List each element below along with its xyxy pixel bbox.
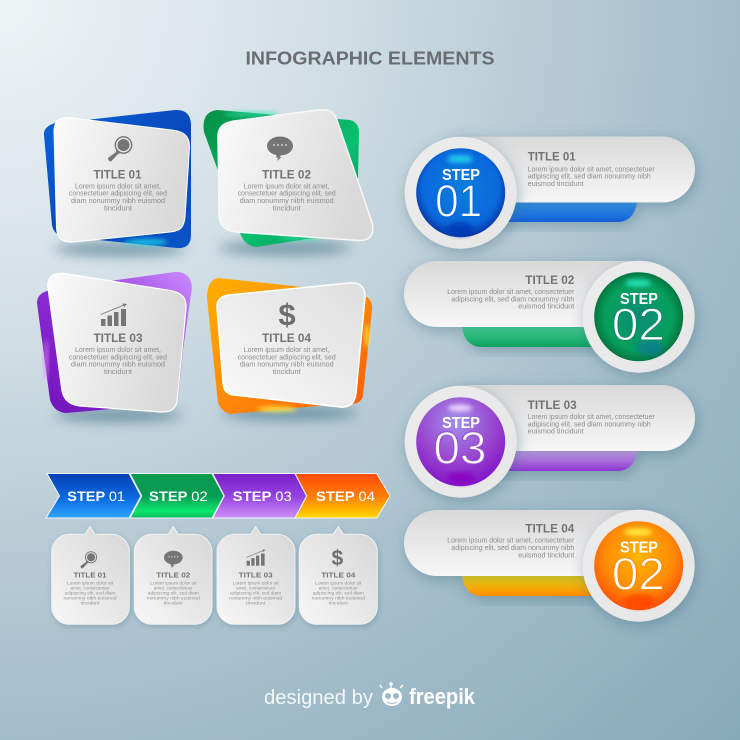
text: body 04: diam nonummy nibh euismod	[240, 360, 334, 369]
text: small body 02: nonummy nibh euismod	[147, 595, 200, 600]
step arrow 3	[213, 474, 307, 518]
icon: small speech bubble	[164, 551, 183, 568]
text: title 04: TITLE 04	[262, 333, 312, 345]
footer credit: freepik	[409, 684, 476, 709]
text: small body 03: adipiscing elit, sed diam	[230, 590, 282, 595]
text: small title 01: TITLE 01	[74, 571, 107, 580]
text: small body 02: Lorem ipsum dolor sit	[150, 580, 197, 585]
text: small body 01: tincidunt	[80, 600, 100, 605]
text: body 01: tincidunt	[104, 203, 132, 212]
text: title 01: TITLE 01	[94, 169, 142, 181]
text: small body 03: Lorem ipsum dolor sit	[233, 580, 280, 585]
text: banner body 01	[528, 164, 655, 188]
step arrow 1	[46, 474, 141, 518]
ball 03	[416, 397, 505, 486]
text: body 02: tincidunt	[273, 203, 301, 212]
ball 04: 02	[612, 548, 665, 599]
icon: small magnifier	[81, 552, 97, 568]
text: small body 01: adipiscing elit, sed diam	[64, 590, 116, 595]
panel: title 03 card	[37, 272, 192, 422]
text: small body 04	[312, 580, 365, 605]
small card 4	[299, 527, 377, 624]
text: body 03	[69, 345, 167, 376]
ball 04: STEP	[620, 540, 658, 557]
text: small title 03: TITLE 03	[239, 571, 273, 580]
text: body 02	[238, 181, 336, 212]
footer credit	[264, 682, 476, 709]
icon: bar chart	[101, 304, 127, 326]
text: title 03: TITLE 03	[94, 333, 142, 345]
text: small body 02: amet, consectetuer	[154, 585, 193, 590]
text: banner body 03: Lorem ipsum dolor sit amet, consectetuer	[528, 412, 655, 421]
text: body 04: Lorem ipsum dolor sit amet,	[244, 345, 330, 354]
text: small body 03: amet, consectetuer	[236, 585, 276, 590]
text: body 01	[69, 181, 167, 212]
text: banner body 01: Lorem ipsum dolor sit amet, consectetuer	[528, 164, 655, 173]
text: small body 04: adipiscing elit, sed diam	[313, 590, 364, 595]
text: body 03: diam nonummy nibh euismod	[71, 360, 165, 369]
text: body 02: consectetuer adipiscing elit, sed	[238, 189, 336, 198]
step banner 04	[404, 510, 695, 622]
icon: small bar chart	[246, 550, 265, 566]
text: banner body 04	[447, 536, 575, 559]
ball 01	[416, 148, 505, 237]
text: body 02: Lorem ipsum dolor sit amet,	[244, 181, 330, 190]
step banner 03	[405, 385, 695, 498]
step arrow 2	[130, 474, 224, 518]
text: small body 03: nonummy nibh euismod	[229, 595, 283, 600]
text: banner body 03: adipiscing elit, sed diam nonummy nibh	[528, 419, 651, 428]
text: banner title 03: TITLE 03	[528, 400, 577, 412]
ball 01: 01	[435, 176, 482, 227]
ball 04	[594, 521, 683, 610]
text: small body 01	[64, 580, 117, 605]
text: small body 02	[147, 580, 200, 605]
text: banner body 04: adipiscing elit, sed diam nonummy nibh	[451, 543, 574, 552]
ball 01: STEP	[442, 167, 480, 184]
text: body 03: consectetuer adipiscing elit, sed	[69, 352, 167, 361]
icon: speech bubble	[267, 136, 293, 161]
icon: freepik logo	[380, 682, 403, 706]
text: small body 02: tincidunt	[164, 600, 184, 605]
text: body 01: consectetuer adipiscing elit, sed	[69, 189, 167, 198]
ball 03: 03	[434, 422, 486, 473]
step arrow 4: STEP 04	[316, 488, 375, 504]
footer credit: designed by	[264, 687, 373, 709]
ball 02: 02	[612, 299, 665, 350]
text: banner title 02: TITLE 02	[525, 275, 574, 287]
text: banner body 02: euismod tincidunt	[518, 302, 574, 311]
text: body 04: tincidunt	[273, 367, 301, 376]
text: body 04	[238, 345, 336, 376]
step arrow 3: STEP 03	[233, 488, 292, 504]
text: small body 02: adipiscing elit, sed diam	[148, 590, 199, 595]
text: small title 04: TITLE 04	[321, 571, 356, 580]
text: banner body 01: adipiscing elit, sed diam nonummy nibh	[528, 172, 651, 181]
text: body 04: consectetuer adipiscing elit, sed	[238, 352, 336, 361]
small card 3	[217, 527, 295, 624]
small card 2	[134, 527, 212, 624]
ball 02: STEP	[620, 291, 658, 308]
step arrow 2: STEP 02	[149, 488, 208, 504]
panel: title 02 card	[204, 110, 373, 255]
text: small body 04: tincidunt	[329, 600, 349, 605]
text: small body 01: Lorem ipsum dolor sit	[67, 580, 114, 585]
icon: magnifier	[108, 137, 132, 162]
text: small body 01: amet, consectetuer	[70, 585, 110, 590]
text: body 02: diam nonummy nibh euismod	[240, 196, 334, 205]
text: small body 04: Lorem ipsum dolor sit	[315, 580, 362, 585]
step banner 01	[405, 136, 695, 249]
title: INFOGRAPHIC ELEMENTS	[246, 48, 494, 68]
text: banner body 04: euismod tincidunt	[518, 550, 574, 559]
text: small body 04: nonummy nibh euismod	[312, 595, 365, 600]
step banner 02	[404, 261, 695, 373]
text: small body 04: amet, consectetuer	[319, 585, 358, 590]
step arrow 4	[295, 474, 390, 518]
text: banner body 03	[528, 412, 655, 436]
step arrow 1: STEP 01	[67, 488, 125, 504]
icon: dollar: $	[278, 297, 296, 332]
small card 1	[52, 527, 129, 624]
ball 02	[594, 272, 683, 361]
text: banner body 02	[447, 287, 575, 311]
text: title 02: TITLE 02	[262, 169, 311, 181]
text: body 01: diam nonummy nibh euismod	[71, 196, 165, 205]
text: body 03: Lorem ipsum dolor sit amet,	[75, 345, 161, 354]
text: small body 03: tincidunt	[246, 600, 266, 605]
text: small title 02: TITLE 02	[156, 571, 190, 580]
text: body 01: Lorem ipsum dolor sit amet,	[75, 181, 161, 190]
text: banner title 04: TITLE 04	[525, 524, 575, 536]
text: body 03: tincidunt	[104, 367, 132, 376]
ball 03: STEP	[442, 415, 480, 432]
text: banner title 01: TITLE 01	[528, 152, 576, 164]
icon: small dollar: $	[331, 547, 343, 570]
text: small body 01: nonummy nibh euismod	[64, 595, 117, 600]
text: small body 03	[229, 580, 283, 605]
text: banner body 02: adipiscing elit, sed diam nonummy nibh	[451, 294, 574, 303]
text: banner body 02: Lorem ipsum dolor sit amet, consectetuer	[447, 287, 575, 296]
text: banner body 04: Lorem ipsum dolor sit amet, consectetuer	[447, 536, 575, 545]
text: banner body 03: euismod tincidunt	[528, 427, 584, 436]
panel: title 04 card	[207, 278, 372, 420]
panel: title 01 card	[44, 110, 191, 256]
text: banner body 01: euismod tincidunt	[528, 179, 584, 188]
